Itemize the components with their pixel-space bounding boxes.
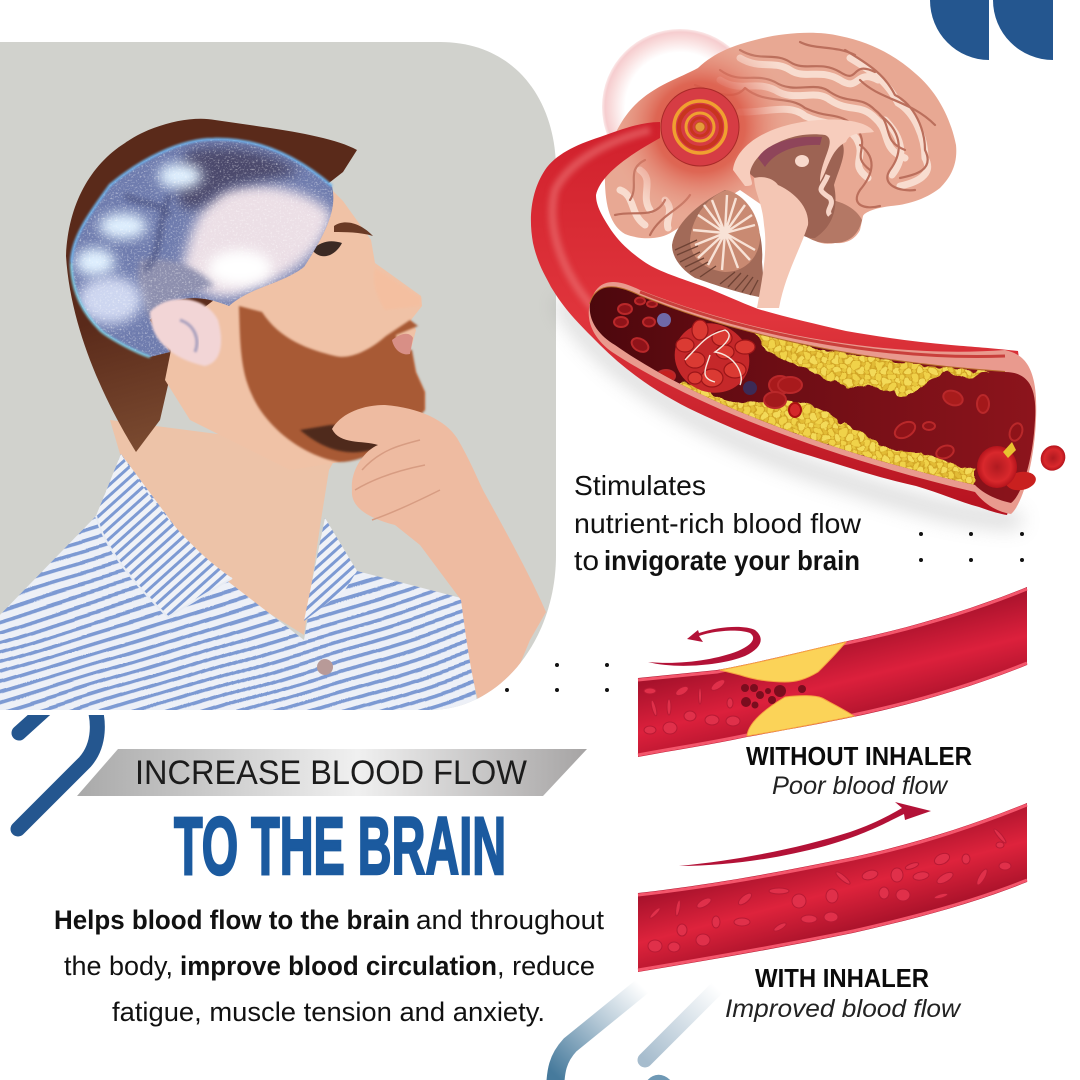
brain folds (600, 27, 935, 235)
arrow: curved return flow (648, 627, 761, 666)
cells (648, 828, 1011, 952)
dot grid left (505, 663, 609, 692)
caption: stimulates blood flow: Stimulates (574, 470, 706, 501)
body text: , reduce (497, 951, 595, 981)
label: without inhaler (746, 741, 972, 800)
body text: the body, (64, 951, 173, 981)
body text: fatigue, muscle tension and anxiety. (112, 997, 545, 1027)
label: without inhaler: Poor blood flow (772, 772, 949, 800)
label: with inhaler (725, 963, 962, 1023)
lower plaque (677, 383, 975, 487)
plaque top (720, 642, 846, 682)
photo panel: man with glowing brain (0, 40, 560, 730)
heading: to the brain: TO THE BRAIN (174, 801, 506, 892)
target rings (661, 88, 739, 166)
body text (54, 905, 605, 1027)
corner shape: navy quotation tabs (930, 0, 1053, 60)
label: with inhaler: Improved blood flow (725, 995, 962, 1023)
clot (657, 313, 757, 395)
plaque bottom (747, 696, 854, 736)
vessel: with inhaler (638, 803, 1027, 972)
heading banner (77, 749, 587, 796)
caption: stimulates blood flow: invigorate your brain (604, 545, 860, 576)
dot grid right (919, 532, 1024, 562)
brain cortex (605, 33, 956, 244)
caption: stimulates blood flow: nutrient-rich blood flow (574, 508, 862, 539)
eye and brow (334, 222, 373, 236)
hair (66, 119, 357, 452)
brain stem (754, 177, 808, 308)
brain interior (thalamus) (745, 132, 844, 238)
upper plaque (752, 330, 990, 396)
brain halo (602, 29, 758, 185)
white blood cell (657, 313, 671, 327)
artery lumen (580, 280, 1040, 510)
artery body (531, 122, 1030, 515)
cerebellum (672, 190, 765, 298)
neck (110, 420, 340, 635)
decorative strokes bottom (555, 980, 725, 1080)
lips (392, 334, 413, 354)
vessel: without inhaler (638, 587, 1027, 757)
artery shadow (560, 300, 1020, 520)
heading banner: INCREASE BLOOD FLOW (135, 754, 527, 792)
red glow around target (619, 49, 790, 214)
escaping blood cells (977, 440, 1070, 492)
trapped cells (741, 684, 806, 708)
shirt with stripes (0, 454, 476, 710)
shirt button (317, 659, 333, 675)
label: without inhaler: WITHOUT INHALER (746, 741, 972, 771)
vessel with brain illustration (531, 27, 1070, 520)
lower brown lobes (795, 199, 862, 243)
glowing brain (71, 139, 333, 366)
caption: stimulates blood flow: to (574, 545, 599, 576)
ventricle (758, 137, 822, 167)
face (165, 190, 425, 470)
body text: Helps blood flow to the brain (54, 905, 410, 935)
blood cells in lumen (614, 298, 1025, 461)
ear (150, 299, 221, 366)
decorative hook top left (18, 700, 97, 829)
arrow: forward flow (679, 802, 931, 866)
artery highlight (552, 130, 650, 315)
artery wall (589, 282, 1036, 514)
hand and arm (332, 405, 546, 700)
pineal detail (795, 155, 809, 167)
beard (239, 306, 425, 462)
body text: and throughout (416, 905, 605, 935)
cells (644, 678, 740, 734)
body text: improve blood circulation (180, 951, 497, 981)
collar (96, 454, 232, 616)
caption: stimulates blood flow (574, 470, 862, 576)
label: with inhaler: WITH INHALER (755, 963, 929, 993)
corpus callosum (733, 120, 874, 186)
nose and cheek shading (422, 298, 423, 300)
